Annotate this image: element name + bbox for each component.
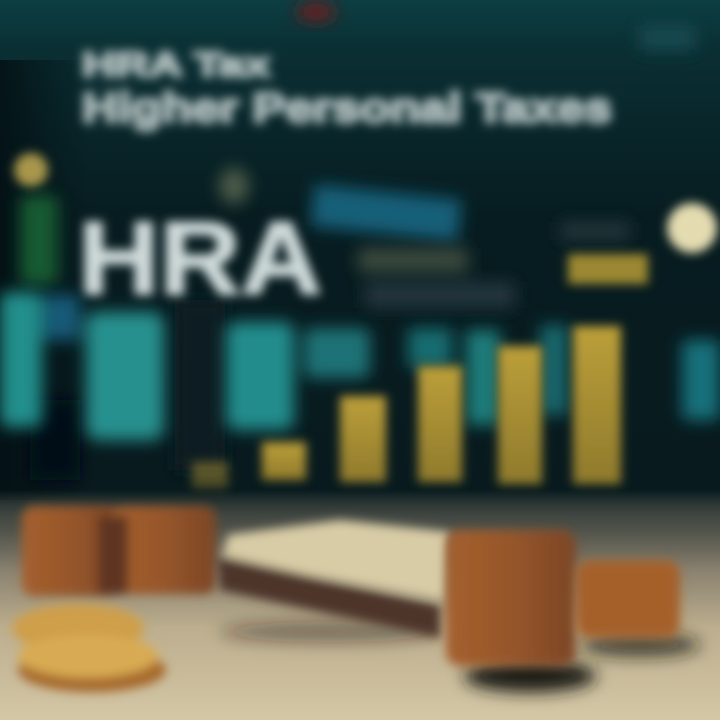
shadows <box>220 622 700 692</box>
person silhouette <box>30 168 249 480</box>
panel: teal third <box>226 322 294 430</box>
muted labels <box>358 222 630 308</box>
blue banner <box>310 184 462 242</box>
coin stack right <box>576 560 680 638</box>
bar chart <box>192 326 621 488</box>
table surface <box>0 490 720 720</box>
coin stack centre <box>446 530 576 666</box>
panel: blue strip <box>44 295 80 340</box>
coin stacks left <box>22 506 216 596</box>
heading: HRA: HRA <box>78 201 322 317</box>
icon: gold orb left <box>14 153 48 187</box>
panel: teal behind bars <box>408 328 452 368</box>
panel: teal behind bars two <box>466 330 500 425</box>
panel: teal right <box>682 340 720 420</box>
gold coins front <box>12 604 166 692</box>
panel: teal second <box>86 312 164 440</box>
book <box>218 520 450 638</box>
book side <box>218 555 440 638</box>
green figure <box>20 195 58 285</box>
title line 2: Higher Personal Taxes <box>82 84 612 131</box>
panel: teal behind bars three <box>540 325 568 415</box>
gold label <box>568 254 648 284</box>
panel: teal left <box>0 292 42 427</box>
icon: bright orb right <box>667 203 717 253</box>
book top <box>222 520 450 600</box>
title <box>82 46 612 131</box>
panel: teal fourth <box>304 328 370 378</box>
teal panels <box>0 292 720 440</box>
title line 1: HRA Tax <box>82 46 270 84</box>
